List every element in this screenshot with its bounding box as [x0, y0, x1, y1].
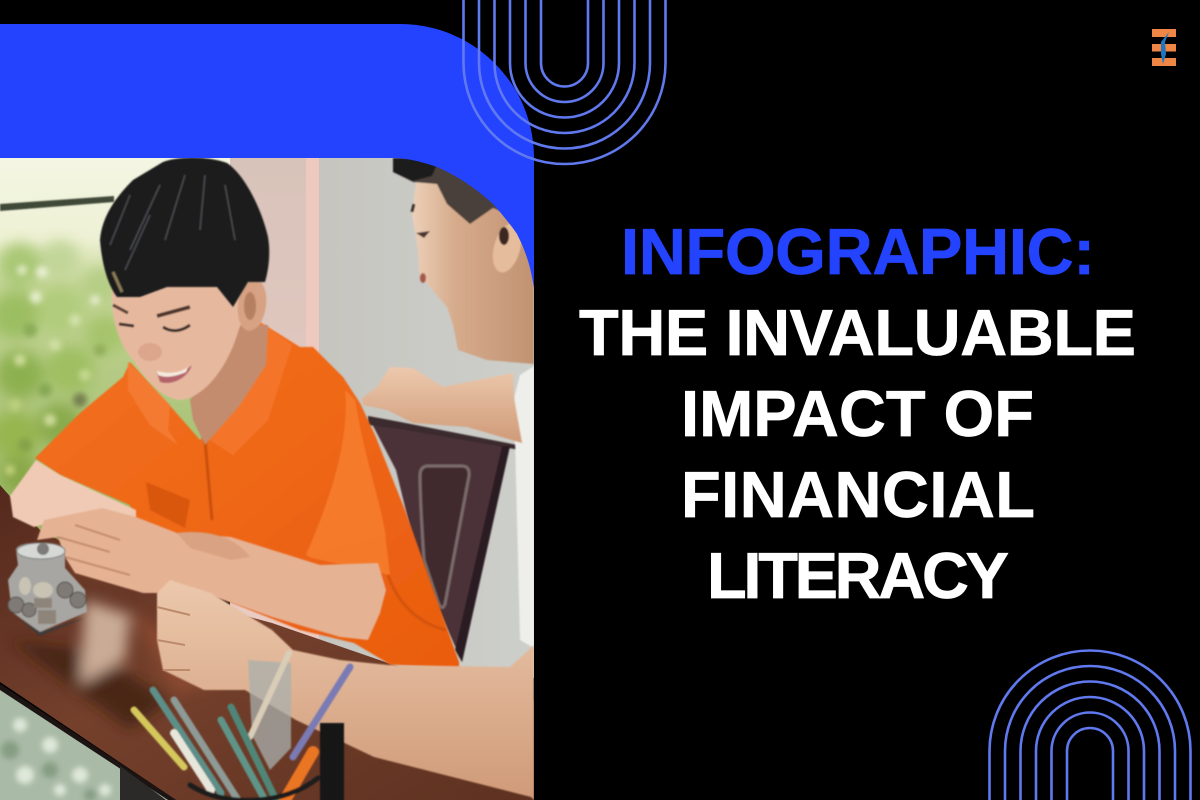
- window frame bar: [0, 196, 114, 211]
- boy's shirt: [35, 322, 459, 668]
- title: LITERACY: [707, 539, 1009, 612]
- title: [579, 215, 1136, 612]
- boy's face: [112, 275, 269, 400]
- pencil holder: [134, 653, 350, 800]
- grey wall: [319, 158, 534, 678]
- boy's neck: [190, 325, 268, 445]
- pink wall: [230, 158, 306, 658]
- garden reflection below table: [0, 684, 176, 800]
- title: THE INVALUABLE: [579, 296, 1136, 369]
- table: [0, 485, 534, 800]
- title: FINANCIAL: [681, 458, 1035, 531]
- title: IMPACT OF: [681, 377, 1034, 450]
- logo: [1152, 29, 1176, 66]
- window with foliage: [0, 158, 232, 558]
- title: INFOGRAPHIC:: [621, 215, 1095, 288]
- concentric arches bottom right: [990, 650, 1190, 800]
- man's head: [393, 158, 534, 364]
- blue curved banner: [0, 24, 534, 288]
- boy's forearms and hands: [10, 460, 386, 640]
- pink trim: [306, 158, 319, 658]
- man's arm and hand on chair: [362, 367, 522, 443]
- photo: boy and father saving coins: [0, 158, 534, 800]
- boy's hair: [100, 158, 269, 307]
- man's knuckle shading: [157, 607, 190, 670]
- chair: [368, 416, 522, 662]
- man's hand and forearm: [157, 580, 534, 800]
- man's white shirt: [514, 366, 534, 648]
- concentric U arcs top: [464, 0, 666, 164]
- coin jar: [8, 542, 87, 636]
